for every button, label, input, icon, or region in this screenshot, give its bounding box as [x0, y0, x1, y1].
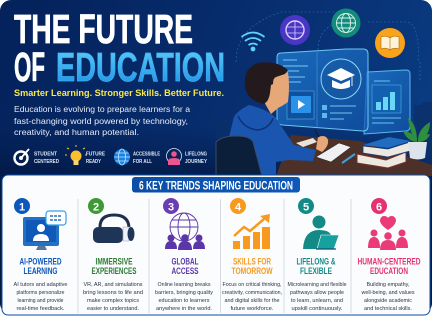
- skyline: [216, 102, 432, 175]
- icon: lifelong journey: [166, 148, 182, 165]
- heading: [296, 256, 336, 276]
- section heading: 6 KEY TRENDS SHAPING EDUCATION: [139, 178, 293, 192]
- badge 4: 4: [235, 202, 242, 214]
- label: student centered: [34, 152, 59, 165]
- trends panel: [2, 175, 430, 315]
- label: student centered: CENTERED: [34, 159, 59, 165]
- intro paragraph: Education is evolving to prepare learners for a: [14, 104, 190, 114]
- body: education to learners: [158, 298, 210, 304]
- icon: future ready bulb: [65, 145, 87, 165]
- heading: [20, 256, 62, 276]
- body: anywhere in the world.: [156, 306, 212, 312]
- desk: [276, 135, 432, 176]
- heading: [358, 256, 421, 276]
- heading: LIFELONG &: [296, 256, 336, 266]
- body: bring lessons to life and: [83, 290, 143, 296]
- label: future ready: FUTURE: [86, 152, 105, 158]
- body: AI tutors and adaptive: [14, 282, 68, 288]
- body: [288, 282, 346, 312]
- plant: [403, 118, 430, 160]
- icon: VR headset: [93, 215, 134, 243]
- heading: EXPERIENCES: [92, 266, 136, 276]
- pen: [342, 154, 355, 163]
- icon: accessible globe: [114, 149, 130, 165]
- body: and technical skills.: [364, 306, 412, 312]
- badge 3: 3: [168, 202, 174, 214]
- heading: IMMERSIVE: [96, 256, 132, 266]
- icon: book: [375, 28, 405, 58]
- heading: FLEXIBLE: [300, 266, 332, 276]
- main panel: [277, 49, 368, 131]
- icon: learner with laptop: [303, 216, 339, 249]
- body: creativity, communication,: [222, 290, 282, 296]
- body: easier to understand.: [87, 306, 139, 312]
- intro paragraph: creativity, and human potential.: [14, 127, 139, 137]
- right panel: [364, 70, 410, 134]
- body: make complex topics: [87, 298, 139, 304]
- intro paragraph: [14, 104, 190, 137]
- body: [14, 282, 68, 312]
- student: [226, 62, 316, 176]
- label: future ready: READY: [86, 159, 101, 165]
- body: upskill continuously.: [292, 306, 343, 312]
- section heading: [132, 177, 300, 192]
- network lines: [236, 12, 420, 82]
- icon: globe: [332, 8, 360, 38]
- body: and digital skills for the: [224, 298, 280, 304]
- icon: student centered target: [14, 149, 29, 164]
- body: to learn, unlearn, and: [291, 298, 343, 304]
- heading: SKILLS FOR: [233, 256, 271, 266]
- body: learning and provide: [18, 298, 64, 304]
- card 6: [358, 198, 421, 312]
- hero illustration: [216, 8, 432, 176]
- body: [83, 282, 143, 312]
- body: Online learning breaks: [158, 282, 211, 288]
- heading: LEARNING: [24, 266, 58, 276]
- dividers: [78, 199, 351, 313]
- heading: [92, 256, 136, 276]
- label: lifelong journey: [185, 152, 207, 165]
- body: [361, 282, 415, 312]
- label: student centered: STUDENT: [34, 152, 58, 158]
- card 3: [155, 198, 213, 312]
- heading: EDUCATION: [370, 266, 408, 276]
- body: alongside academic: [364, 298, 412, 304]
- title: [14, 6, 225, 90]
- body: pathways allow people: [290, 290, 344, 296]
- body: [222, 282, 282, 312]
- hand and pen: [315, 130, 328, 152]
- label: future ready: [86, 152, 105, 165]
- intro paragraph: fast-changing world powered by technology,: [14, 116, 188, 126]
- icon: AI tutor: [23, 211, 66, 250]
- title: THE FUTURE: [14, 6, 193, 52]
- chair: [216, 136, 262, 176]
- open notebook: [316, 143, 351, 162]
- badge 6: 6: [376, 202, 382, 214]
- body: platforms personalize: [16, 290, 64, 296]
- heading: ACCESS: [172, 266, 198, 276]
- body: well-being, and values: [361, 290, 415, 296]
- card 5: [288, 198, 346, 312]
- label: lifelong journey: JOURNEY: [185, 159, 207, 165]
- heading: TOMORROW: [232, 266, 273, 276]
- icon: people and heart: [368, 216, 408, 250]
- body: Microlearning and flexible: [288, 282, 346, 288]
- body: Focus on critical thinking,: [222, 282, 282, 288]
- title: EDUCATION: [56, 44, 225, 90]
- tagline: Smarter Learning. Stronger Skills. Better Future.: [14, 87, 224, 98]
- icon: wifi: [242, 32, 264, 50]
- body: Building empathy,: [366, 282, 410, 288]
- heading: [232, 256, 273, 276]
- title: OF: [14, 44, 45, 90]
- label: accessible for all: ACCESSIBLE: [133, 152, 160, 158]
- label: accessible for all: [133, 152, 160, 165]
- card 1: [14, 198, 68, 312]
- loose paper: [296, 138, 317, 147]
- heading: AI-POWERED: [20, 256, 62, 266]
- body: real-time feedback.: [16, 306, 65, 312]
- label: accessible for all: FOR ALL: [133, 159, 152, 165]
- badge 1: 1: [19, 202, 25, 214]
- body: barriers, bringing quality: [155, 290, 213, 296]
- heading: GLOBAL: [172, 256, 199, 266]
- card 2: [83, 198, 143, 312]
- books: [357, 137, 411, 168]
- body: VR, AR, and simulations: [84, 282, 143, 288]
- icon: growth chart: [233, 214, 270, 249]
- label: lifelong journey: LIFELONG: [185, 152, 207, 158]
- body: [155, 282, 213, 312]
- feature row: [14, 145, 207, 165]
- heading: [172, 256, 199, 276]
- badge 2: 2: [93, 202, 99, 214]
- badge 5: 5: [303, 202, 309, 214]
- card 4: [222, 198, 282, 312]
- icon: global access: [165, 213, 205, 250]
- body: future workforce.: [230, 306, 274, 312]
- icon: brain: [280, 15, 310, 45]
